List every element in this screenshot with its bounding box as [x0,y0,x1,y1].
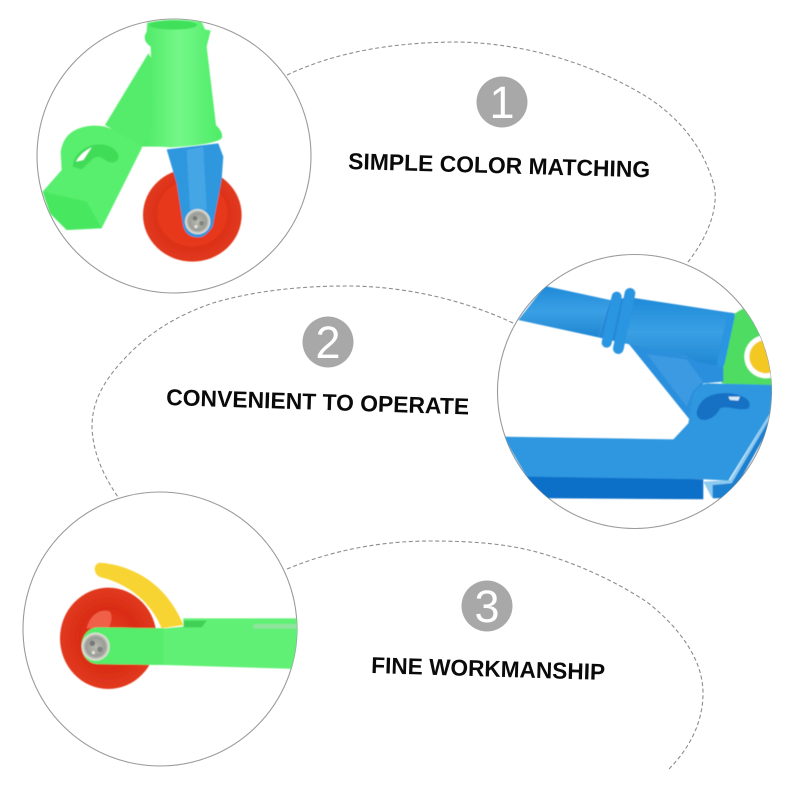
badge: number 2: 2 [315,317,341,368]
badge: number 2 [302,316,354,368]
green deck plate [43,126,142,230]
blue handle tube [518,286,610,337]
panel: circle 3 wheel and green deck [23,492,298,766]
green head with yellow wheel detail [720,308,772,386]
wheel [143,168,242,262]
badge: number 3: 3 [474,581,500,632]
badge: number 1 [476,76,528,128]
dark underside [523,475,703,499]
green head tube [143,20,222,147]
screw [185,209,210,234]
dashed outline: feature 3 [287,541,703,770]
blue fork [167,143,223,237]
green brace [105,53,170,147]
embossed mark [253,624,297,629]
slot [184,621,207,627]
red wheel [60,588,157,689]
badge: number 1: 1 [489,77,515,128]
label: convenient to operate: CONVENIENT TO OPERATE [166,384,470,420]
slot [697,393,750,420]
label: simple color matching: SIMPLE COLOR MATCHING [348,148,650,182]
green deck bar [82,618,298,669]
blue deck bar and bracket [503,383,773,481]
badge: number 3 [462,580,512,632]
label: fine workmanship: FINE WORKMANSHIP [371,652,606,685]
dashed outline: feature 1 [287,42,715,262]
screw [82,633,110,661]
light edge [703,413,770,497]
gusset [628,343,723,420]
panel: circle 2 blue scooter frame [498,254,788,528]
yellow fender [95,563,183,628]
panel: circle 1 green scooter head with wheel [37,19,311,293]
slot [73,144,119,169]
dashed outline: feature 2 [92,286,513,497]
tube collar rings [607,293,731,363]
